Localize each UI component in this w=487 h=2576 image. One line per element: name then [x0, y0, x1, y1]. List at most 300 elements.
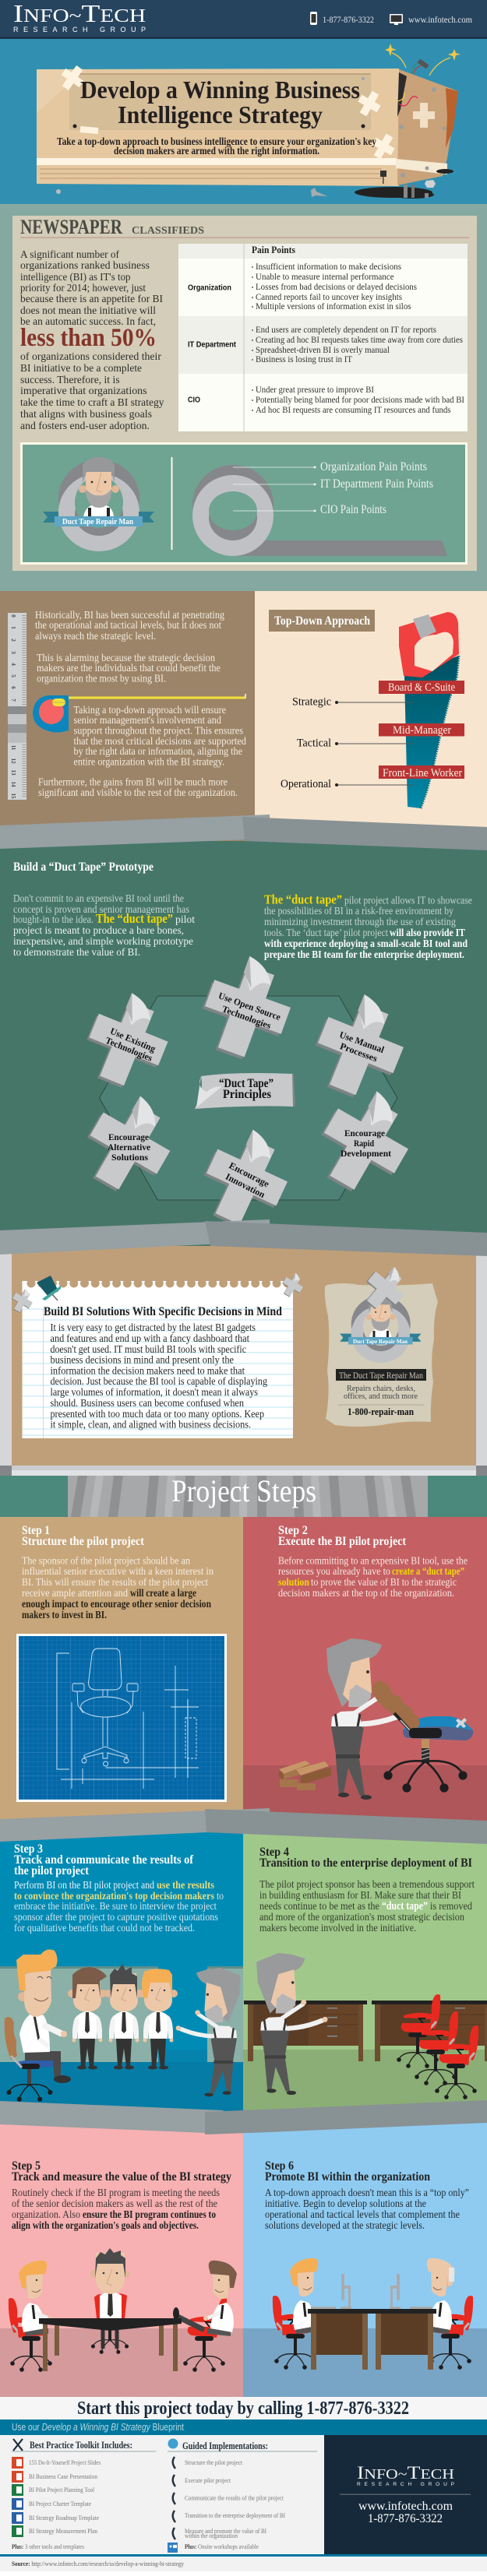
- text block: duct tape pilot: tools. The ‘duct tape’ pilot project: [264, 927, 388, 938]
- text block: don't commit: [13, 892, 195, 958]
- section: build with decisions in mind: [0, 1219, 487, 1476]
- panel: step 3: [0, 1826, 243, 2122]
- text block: intro: take the time to craft a BI strategy: [20, 397, 164, 409]
- heading: notepaper: Build BI Solutions With Specific Decisions in Mind: [44, 1305, 282, 1318]
- text block: notepaper body: and features and end up with a fancy dashboard that: [50, 1332, 249, 1344]
- text block: step 3: Perform BI on the BI pilot project and: [14, 1879, 154, 1891]
- text block: intro: imperative that organizations: [20, 385, 147, 397]
- guided list: Plus: Onsite workshops available: [185, 2543, 259, 2550]
- icon: ruler: 7: [10, 699, 16, 702]
- text block: step 4: is removed: [430, 1900, 472, 1912]
- text block: historically: always reach the strategic level.: [35, 630, 156, 642]
- text block: notepaper body: decision. Just because the BI tool is capable of displaying: [50, 1375, 267, 1387]
- hero panel: [0, 39, 487, 204]
- text block: intro: BI initiative to be a complete: [20, 363, 142, 375]
- text block: duct tape pilot: minimizing investment through the use of existing: [264, 916, 456, 927]
- callouts: pain point layers: CIO Pain Points: [320, 503, 386, 516]
- toolkit list: BI Strategy Measurement Plan: [29, 2527, 98, 2535]
- table: pain points: Organization: [188, 284, 231, 293]
- text block: step 6: initiative. Begin to develop solutions at the: [265, 2198, 426, 2209]
- text block: intro: success. Therefore, it is: [20, 375, 120, 386]
- icon: tape cross: [356, 1259, 414, 1318]
- text block: intro: less than 50%: [20, 324, 157, 352]
- icon: tape measure: [33, 694, 246, 732]
- text block: intro: intelligence (BI) as IT's top: [20, 272, 131, 283]
- contact details: www.infotech.com: [358, 2500, 453, 2513]
- text block: intro: organizations ranked business: [20, 260, 150, 272]
- icon: ruler: 13: [10, 769, 16, 776]
- figure: standing orange-haired man: [139, 1969, 178, 2070]
- text block: top-down benefits: senior management's involvement and: [73, 714, 221, 726]
- guided list: [185, 2458, 285, 2550]
- tape: use existing: Technologies: [104, 1035, 154, 1064]
- subtitle: Take a top-down approach to business intelligence to ensure your organization's key: [57, 135, 376, 147]
- text block: step 1: The sponsor of the pilot project should be an: [22, 1555, 190, 1567]
- poster phone: 1-800-repair-man: [348, 1406, 414, 1417]
- phone number: 1-877-876-3322: [323, 14, 374, 25]
- text block: step 5: of the senior decision makers as well as the rest of the: [12, 2198, 217, 2209]
- icon: tape pieces: [8, 1270, 307, 1316]
- figure: standing dark-haired man: [104, 1964, 143, 2070]
- icon: ruler: 11: [10, 745, 16, 751]
- icons: phone handsets: [173, 2457, 175, 2539]
- panel: contact: [324, 2435, 487, 2554]
- icon: ruler: 1: [10, 626, 16, 629]
- title: Intelligence Strategy: [118, 100, 323, 128]
- heading: step 5: Step 5: [12, 2159, 41, 2173]
- text block: notepaper body: business decisions in mind and present only the: [50, 1354, 234, 1366]
- tape: center principles: “Duct Tape”: [219, 1077, 273, 1090]
- text block: duct tape pilot: The “duct tape”: [264, 892, 342, 907]
- heading: step 3: Track and communicate the results of: [14, 1853, 194, 1867]
- labels: board, manager, worker: Front-Line Worker: [383, 767, 462, 779]
- toolkit list: BI Business Case Presentation: [29, 2472, 98, 2480]
- tape: use existing: [75, 984, 180, 1097]
- text block: step 1: makers to invest in BI.: [22, 1609, 107, 1621]
- tape: use open source: Use Open Source: [217, 990, 283, 1022]
- icon: ruler: 2: [10, 639, 16, 642]
- labels: board, manager, worker: Board & C-Suite: [388, 681, 455, 694]
- heading: build prototype: Build a “Duct Tape” Prototype: [13, 860, 154, 874]
- text block: step 5: ensure the BI program continues to: [83, 2208, 216, 2220]
- text block: top-down benefits: entire organization with the BI strategy.: [73, 756, 224, 768]
- table: pain points: Ad hoc BI requests are consuming IT resources and funds: [256, 404, 451, 415]
- logo: RESEARCH GROUP: [13, 26, 146, 33]
- diagram: duct tape principles: [71, 947, 425, 1238]
- tape: use manual: [302, 984, 416, 1108]
- text block: top-down benefits: by the right data or information, aligning the: [73, 745, 242, 757]
- text block: top-down benefits: Taking a top-down approach will ensure: [73, 704, 226, 716]
- heading: step 4: [259, 1846, 472, 1870]
- table: pain points: [178, 244, 468, 431]
- text block: step 1: BI. This will ensure the results of the pilot project: [22, 1576, 208, 1588]
- tape: use manual: Use Manual: [338, 1029, 386, 1055]
- tape divider: [0, 1808, 487, 1844]
- icon: saw: [399, 612, 459, 808]
- table: pain points: Creating ad hoc BI requests takes time away from core duties: [256, 334, 463, 345]
- callouts: pain point layers: [233, 460, 433, 516]
- text block: historically: Historically, BI has been successful at penetrating: [35, 609, 224, 621]
- illustration: broken box: [37, 62, 458, 199]
- text block: step 2: Before committing to an expensive BI tool, use the: [278, 1555, 468, 1567]
- figure: repair man: [176, 1968, 241, 2096]
- logo: RESEARCH GROUP: [357, 2482, 454, 2487]
- illustration: tape roll: [192, 465, 447, 556]
- figure: standing brown-haired man: [68, 1967, 107, 2070]
- heading: classifieds: CLASSIFIEDS: [132, 225, 204, 237]
- poster description: Repairs chairs, desks,: [347, 1384, 415, 1393]
- illustration: desks and chairs: [244, 1953, 487, 2099]
- contact details: [358, 2500, 453, 2525]
- text block: duct tape pilot: the possibilities of BI in a risk-free environment by: [264, 905, 453, 917]
- text block: notepaper body: information the decision makers need to make that: [50, 1365, 245, 1377]
- banner: project steps: [0, 1473, 487, 1517]
- tape: encourage innovation: Innovation: [224, 1171, 267, 1200]
- panel: step 1: [0, 1517, 243, 1822]
- heading: project steps: Project Steps: [171, 1473, 316, 1508]
- figure: repair man: [256, 1953, 328, 2095]
- illustration: boardroom meeting: [9, 2248, 237, 2372]
- levels: strategic, tactical, operational: Operational: [281, 778, 331, 790]
- guided list: Execute pilot project: [185, 2476, 231, 2484]
- text block: top-down benefits: significant and visible to the rest of the organization.: [38, 787, 238, 798]
- illustration: chair blueprint: [16, 1634, 227, 1802]
- header bar: [0, 0, 487, 39]
- panel: toolkit: [0, 2435, 324, 2554]
- callouts: pain point layers: Organization Pain Points: [320, 460, 427, 473]
- tape divider: [0, 815, 487, 850]
- text block: step 1: receive ample attention and: [22, 1587, 128, 1599]
- logo: INFO~ TECH: [357, 2463, 454, 2483]
- furniture: desks: [308, 2309, 436, 2370]
- table: pain points: End users are completely dependent on IT for reports: [256, 324, 436, 335]
- heading: step 1: Step 1: [22, 1524, 50, 1537]
- section: newspaper classifieds: [0, 204, 487, 591]
- text block: step 3: to convince the organization's top decision makers: [14, 1890, 214, 1902]
- figure: left executive: [9, 2261, 52, 2372]
- text block: historically: the operational and tactical levels, but it does not: [35, 619, 221, 631]
- figure: left executive: [273, 2258, 323, 2370]
- poster description: offices, and much more: [344, 1392, 418, 1401]
- call to action: Start this project today by calling 1-877-876-3322: [77, 2398, 409, 2419]
- text block: step 3: to: [217, 1890, 224, 1902]
- text block: notepaper body: it simple, clean, and aligned with business decisions.: [50, 1419, 251, 1431]
- panel: step 5: [0, 2118, 243, 2397]
- heading: step 3: the pilot project: [14, 1864, 90, 1877]
- icon: monitor: [390, 14, 403, 25]
- table: pain points: Spreadsheet-driven BI is overly manual: [256, 344, 390, 355]
- text block: step 1: [22, 1555, 214, 1621]
- table: pain points: Pain Points: [252, 245, 295, 255]
- text block: step 2: resources you already have to: [278, 1565, 390, 1577]
- icon: sparks and wires: [385, 44, 461, 76]
- icon: ruler: 12: [10, 758, 16, 764]
- text block: don't commit: inexpensive, and simple working prototype: [13, 935, 193, 947]
- heading: guided implementations: Guided Implementations:: [182, 2441, 268, 2451]
- text block: step 3: embrace the initiative. Be sure to interview the project: [14, 1900, 217, 1912]
- heading: newspaper: NEWSPAPER: [20, 216, 122, 238]
- furniture: stacked red chairs: [397, 1994, 478, 2099]
- tape: encourage alternative solutions: Alternative: [108, 1142, 151, 1153]
- text block: step 6: solutions developed at the strategic levels.: [265, 2219, 425, 2231]
- tape: encourage rapid development: [304, 1078, 425, 1205]
- text block: step 3: sponsor after the project to capture positive quotations: [14, 1911, 218, 1923]
- section: historically and top-down approach: [0, 591, 487, 848]
- text block: don't commit: Don't commit to an expensive BI tool until the: [13, 892, 184, 904]
- text block: step 3: use the results: [157, 1879, 214, 1891]
- text block: don't commit: to demonstrate the value of BI.: [13, 946, 140, 958]
- figure: right executive with feet up: [173, 2261, 237, 2372]
- illustration: team meeting: [5, 1949, 241, 2102]
- text block: intro: and fosters end-user adoption.: [20, 421, 150, 432]
- text block: notepaper body: should. Business users can become confused when: [50, 1397, 244, 1409]
- text block: step 4: and more of the organization's most strategic decision: [259, 1911, 464, 1923]
- heading: step 2: [278, 1524, 407, 1548]
- text block: step 4: “duct tape”: [382, 1900, 428, 1913]
- poster description: [344, 1384, 418, 1401]
- heading: step 6: Step 6: [265, 2159, 294, 2173]
- tape: encourage alternative solutions: [71, 1083, 186, 1205]
- text block: step 5: organization. Also: [12, 2208, 80, 2220]
- text block: top-down benefits: [38, 704, 246, 798]
- text block: step 2: to prove the value of BI to the strategic: [311, 1576, 457, 1588]
- title: [80, 76, 360, 128]
- table: pain points: Losses from bad decisions or delayed decisions: [256, 281, 417, 292]
- text block: notepaper body: large volumes of information, it doesn't mean it always: [50, 1386, 258, 1398]
- table: pain points: Multiple versions of information exist in silos: [256, 301, 411, 311]
- guided list: Structure the pilot project: [185, 2458, 243, 2466]
- icon: ruler: 14: [10, 782, 16, 787]
- toolkit list: BI Strategy Roadmap Template: [29, 2514, 99, 2521]
- text block: step 6: operational and tactical levels that complement the: [265, 2208, 460, 2220]
- tape: use open source: Technologies: [221, 1003, 273, 1031]
- text block: top-down benefits: that the most critical decisions are supported: [73, 735, 246, 747]
- text block: step 2: solution: [278, 1576, 309, 1588]
- text block: don't commit: bought-in to the idea.: [13, 913, 94, 925]
- guided list: Transition to the enterprise deployment of BI: [185, 2511, 285, 2519]
- text block: step 5: [12, 2187, 220, 2231]
- figure: center executive: [90, 2248, 130, 2354]
- icon: ruler: 15: [10, 793, 16, 799]
- table: pain points: Business is losing trust in IT: [256, 354, 353, 364]
- tape: encourage innovation: Encourage: [228, 1160, 272, 1190]
- heading: step 5: Track and measure the value of the BI strategy: [12, 2170, 231, 2184]
- text block: step 2: decision makers at the top of the organization.: [278, 1587, 454, 1599]
- heading: top-down approach: Top-Down Approach: [274, 614, 370, 628]
- table: pain points: Insufficient information to make decisions: [256, 261, 401, 272]
- table: pain points: Unable to measure internal performance: [256, 271, 394, 282]
- table: pain points: Potentially being blamed for poor decisions made with bad BI: [256, 394, 464, 405]
- illustration: executives at desks: [273, 2258, 473, 2370]
- tape: encourage innovation: [190, 1119, 302, 1238]
- toolkit list: BI Pilot Project Planning Tool: [29, 2486, 95, 2493]
- toolkit list: [12, 2458, 101, 2550]
- section: duct tape prototype: [0, 815, 487, 1250]
- callouts: pain point layers: IT Department Pain Points: [320, 477, 433, 491]
- badge label: Duct Tape Repair Man: [62, 518, 133, 526]
- guided list: within the organization: [185, 2532, 238, 2539]
- subtitle: decision makers are armed with the right information.: [114, 145, 319, 157]
- heading: top-down approach: [269, 610, 375, 632]
- tape: center principles: [195, 1073, 295, 1109]
- footer: source: [0, 2554, 487, 2576]
- heading: step 6: Promote BI within the organization: [265, 2170, 430, 2184]
- panel: step 4: [243, 1826, 487, 2122]
- toolkit list: BI Project Charter Template: [29, 2500, 91, 2507]
- text block: notepaper body: doesn't get used. IT must build BI tools with specific: [50, 1343, 246, 1355]
- footer: source: Source: http://www.infotech.com/research/ss/develop-a-winning-bi-strategy: [12, 2560, 185, 2567]
- panel: duct tape diagram: [22, 444, 466, 564]
- heading: step 1: Structure the pilot project: [22, 1535, 145, 1548]
- text block: don't commit: The “duct tape”: [96, 911, 173, 926]
- heading: step 2: Step 2: [278, 1524, 308, 1537]
- text block: notepaper body: [50, 1321, 267, 1431]
- icon: ruler: 4: [10, 663, 16, 666]
- logo: INFO~ TECH: [13, 0, 146, 27]
- guided list: Measure and promote the value of BI: [185, 2527, 266, 2535]
- text block: step 2: [278, 1555, 468, 1599]
- text block: intro: [20, 249, 164, 432]
- heading: step 4: Transition to the enterprise deployment of BI: [259, 1856, 472, 1870]
- icon: workshop: [168, 2543, 178, 2553]
- table: pain points: CIO: [188, 396, 200, 405]
- furniture: desks: [244, 2001, 487, 2061]
- panel: repair man poster: [325, 1259, 438, 1427]
- guided list: Communicate the results of the pilot project: [185, 2494, 284, 2502]
- levels: strategic, tactical, operational: [281, 696, 413, 790]
- text block: step 3: for qualitative benefits that could not be tracked.: [14, 1922, 195, 1934]
- poster title: The Duct Tape Repair Man: [339, 1371, 423, 1381]
- text block: duct tape pilot: prepare the BI team for the enterprise deployment.: [264, 948, 464, 960]
- tape: encourage alternative solutions: Encourage: [108, 1131, 150, 1142]
- text block: notepaper body: presented with too much data or too many options. Keep: [50, 1408, 264, 1420]
- text block: step 1: influential senior executive with a keen interest in: [22, 1565, 214, 1577]
- figure: seated executive: [5, 1949, 71, 2102]
- tape: encourage rapid development: Development: [341, 1148, 391, 1159]
- illustration: repair man badge: [340, 1293, 422, 1363]
- heading: step 2: Execute the BI pilot project: [278, 1535, 407, 1548]
- contact details: 1-877-876-3322: [368, 2512, 443, 2525]
- figure: right executive: [422, 2258, 473, 2370]
- text block: step 4: [259, 1878, 475, 1934]
- panel: notepaper: [8, 1270, 307, 1438]
- text block: notepaper body: It is very easy to get distracted by the latest BI gadgets: [50, 1321, 256, 1333]
- text block: historically: [35, 609, 224, 684]
- levels: strategic, tactical, operational: Tactical: [297, 737, 331, 750]
- text block: top-down benefits: support throughout the project. This ensures: [73, 725, 243, 737]
- text block: historically: organization the most by using BI.: [37, 673, 166, 684]
- icon: ruler: 5: [10, 674, 16, 677]
- tape divider: [0, 1219, 487, 1256]
- text block: duct tape pilot: with experience deploying a small-scale BI tool and: [264, 938, 468, 949]
- text block: intro: of organizations considered their: [20, 351, 161, 363]
- toolkit icons: [12, 2457, 23, 2537]
- heading: toolkit: Best Practice Toolkit Includes:: [30, 2440, 132, 2451]
- heading: step 3: Step 3: [14, 1842, 43, 1856]
- text block: step 5: Routinely check if the BI program is meeting the needs: [12, 2187, 220, 2198]
- text block: step 5: align with the organization's goals and objectives.: [12, 2219, 199, 2231]
- levels: strategic, tactical, operational: Strategic: [292, 696, 331, 709]
- labels: board, manager, worker: [379, 681, 464, 779]
- text block: step 2: create a “duct tape”: [392, 1565, 464, 1577]
- title: Develop a Winning Business: [80, 76, 360, 104]
- icon: phone: [310, 12, 317, 25]
- text block: duct tape pilot: will also provide IT: [390, 927, 465, 938]
- illustration: wall and floor: [0, 1966, 243, 2122]
- badge label: Duct Tape Repair Man: [353, 1338, 408, 1345]
- heading: step 4: Step 4: [259, 1846, 289, 1859]
- tape: use manual: Processes: [338, 1040, 379, 1064]
- toolkit list: 155 Do-It-Yourself Project Slides: [29, 2458, 101, 2466]
- text block: step 6: [265, 2187, 469, 2231]
- blueprint band: Use our Develop a Winning BI Strategy Blueprint: [12, 2422, 184, 2433]
- text block: intro: does not mean the initiative will: [20, 305, 156, 317]
- toolkit list: Plus: 3 other tools and templates: [12, 2543, 84, 2550]
- tape: encourage alternative solutions: Solutions: [111, 1152, 148, 1163]
- labels: board, manager, worker: Mid-Manager: [393, 724, 451, 737]
- tape: encourage rapid development: Rapid: [354, 1138, 374, 1149]
- icon: tools: [13, 2439, 23, 2451]
- panel: step 2: [243, 1517, 487, 1822]
- icon: ruler: [8, 613, 26, 800]
- panel: step 6: [243, 2118, 487, 2397]
- tape: use existing: Use Existing: [108, 1026, 157, 1054]
- text block: step 3: [14, 1879, 224, 1934]
- text block: historically: makers are the individuals that could benefit the: [37, 662, 221, 674]
- heading: step 3: [14, 1842, 194, 1877]
- furniture: monitors: [311, 2274, 432, 2309]
- tape: center principles: Principles: [223, 1088, 271, 1101]
- text block: step 4: needs continue to be met as the: [259, 1900, 379, 1912]
- heading: step 1: [22, 1524, 145, 1548]
- table: pain points: Canned reports fail to uncover key insights: [256, 291, 402, 302]
- text block: don't commit: project is meant to produce a bare bones,: [13, 924, 184, 936]
- heading: step 6: [265, 2159, 430, 2184]
- table: pain points: IT Department: [188, 341, 237, 350]
- icon: ruler: 6: [10, 686, 16, 689]
- furniture: table: [39, 2318, 182, 2371]
- text block: don't commit: concept is proven and senior management has: [13, 903, 189, 915]
- tape: use open source: [191, 947, 302, 1069]
- illustration: duct tape repair man: [43, 457, 154, 551]
- icon: ruler: 3: [10, 651, 16, 654]
- text block: intro: A significant number of: [20, 249, 119, 261]
- tape: encourage rapid development: Encourage: [344, 1128, 386, 1138]
- subtitle: [57, 135, 376, 157]
- tape divider: [0, 2100, 487, 2134]
- icon: push pin: [37, 1276, 61, 1300]
- icon: ruler: 0: [10, 614, 16, 618]
- text block: intro: priority for 2014; however, just: [20, 283, 146, 294]
- text block: intro: be an automatic success. In fact,: [20, 316, 156, 328]
- text block: step 1: enough impact to encourage other senior decision: [22, 1598, 211, 1610]
- text block: duct tape pilot: [264, 892, 472, 960]
- icon: globe: [168, 2439, 178, 2448]
- text block: step 1: will create a large: [130, 1587, 196, 1599]
- text block: top-down benefits: Furthermore, the gains from BI will be much more: [38, 776, 228, 788]
- text block: intro: because there is an appetite for BI: [20, 294, 163, 305]
- text block: don't commit: pilot: [175, 913, 195, 925]
- heading: step 5: [12, 2159, 231, 2184]
- blueprint band: [0, 2419, 487, 2435]
- text block: intro: that aligns with business goals: [20, 409, 152, 421]
- website: www.infotech.com: [408, 14, 473, 25]
- table: pain points: Under great pressure to improve BI: [256, 384, 374, 395]
- text block: step 4: makers become involved in the initiative.: [259, 1922, 416, 1934]
- text block: step 4: in building enthusiasm for BI. Make sure that their BI: [259, 1889, 461, 1901]
- illustration: repair man fixing chair: [279, 1638, 473, 1800]
- text block: historically: This is alarming because the strategic decision: [37, 652, 215, 663]
